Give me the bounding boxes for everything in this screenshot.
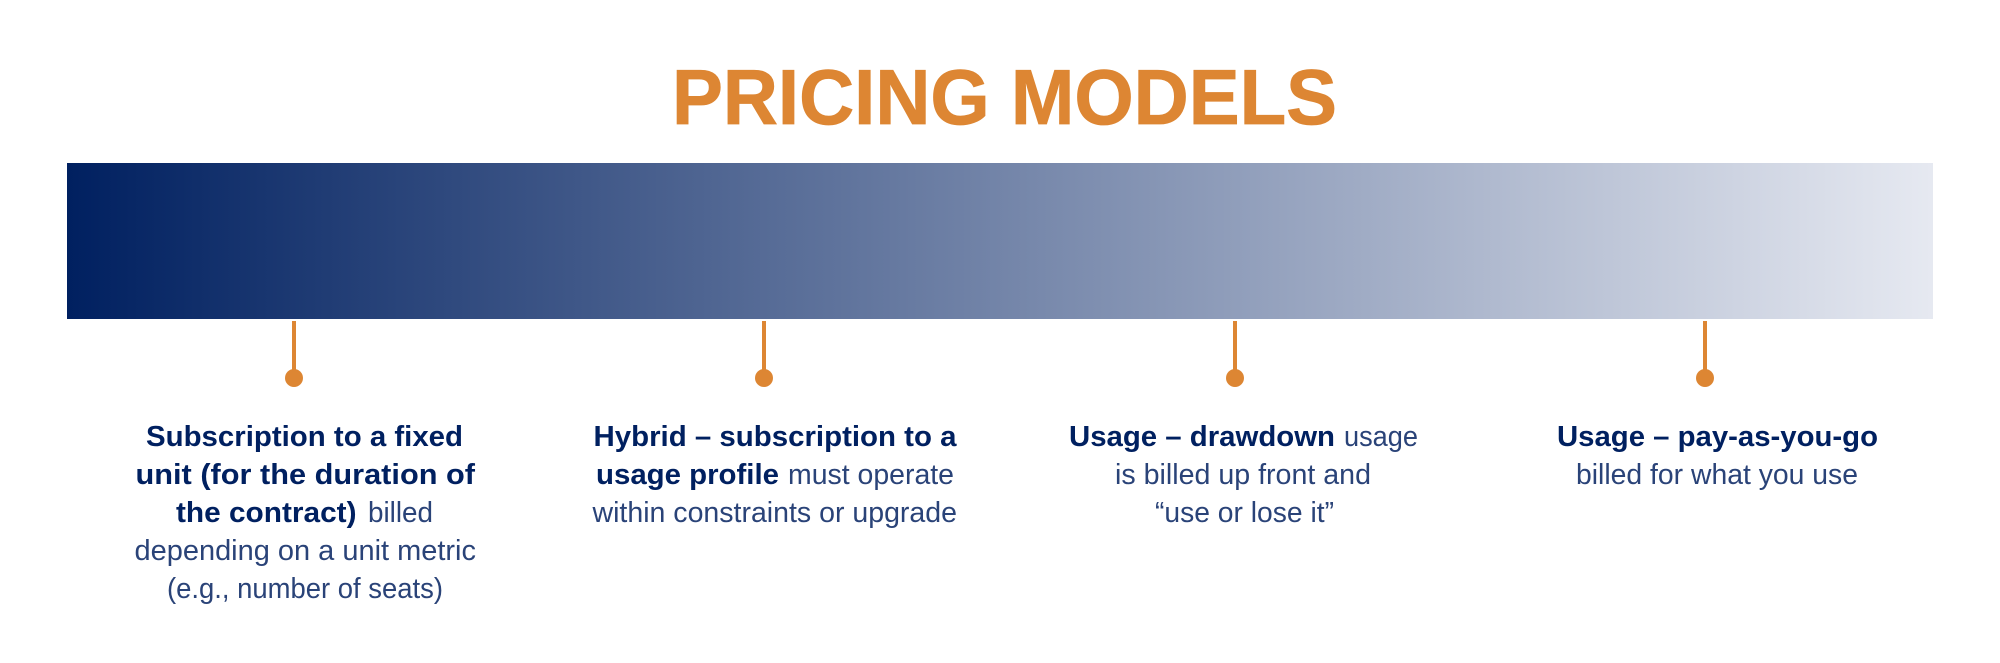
text block: usage drawdown: Usage – drawdown (1069, 421, 1335, 453)
text block: subscription: unit (for the duration of (136, 459, 476, 491)
text block: usage pay-as-you-go: Usage – pay-as-you-go (1557, 421, 1878, 453)
text block: hybrid: Hybrid – subscription to a (594, 421, 958, 453)
marker: usage pay-as-you-go (1696, 321, 1714, 387)
text block: usage drawdown: is billed up front and (1115, 459, 1371, 491)
text block: usage drawdown: “use or lose it” (1155, 497, 1334, 529)
text block: subscription: depending on a unit metric (134, 535, 476, 567)
marker: usage drawdown (1226, 321, 1244, 387)
text block: subscription: (e.g., number of seats) (167, 573, 443, 605)
text block: usage pay-as-you-go: billed for what you use (1576, 459, 1858, 491)
text block: hybrid: within constraints or upgrade (591, 497, 957, 529)
text block: hybrid (591, 421, 958, 529)
title: PRICING MODELS (672, 53, 1337, 141)
text block: hybrid: must operate (788, 459, 954, 491)
text block: usage pay-as-you-go (1557, 421, 1878, 491)
text block: subscription: the contract) (176, 497, 356, 529)
marker: hybrid (755, 321, 773, 387)
text block: hybrid: usage profile (596, 459, 779, 491)
text block: usage drawdown (1069, 421, 1418, 529)
text block: subscription (134, 421, 476, 605)
text block: subscription: billed (368, 497, 433, 529)
text block: subscription: Subscription to a fixed (146, 421, 463, 453)
marker: subscription (285, 321, 303, 387)
text block: usage drawdown: usage (1344, 421, 1418, 453)
gradient spectrum bar (67, 163, 1933, 319)
